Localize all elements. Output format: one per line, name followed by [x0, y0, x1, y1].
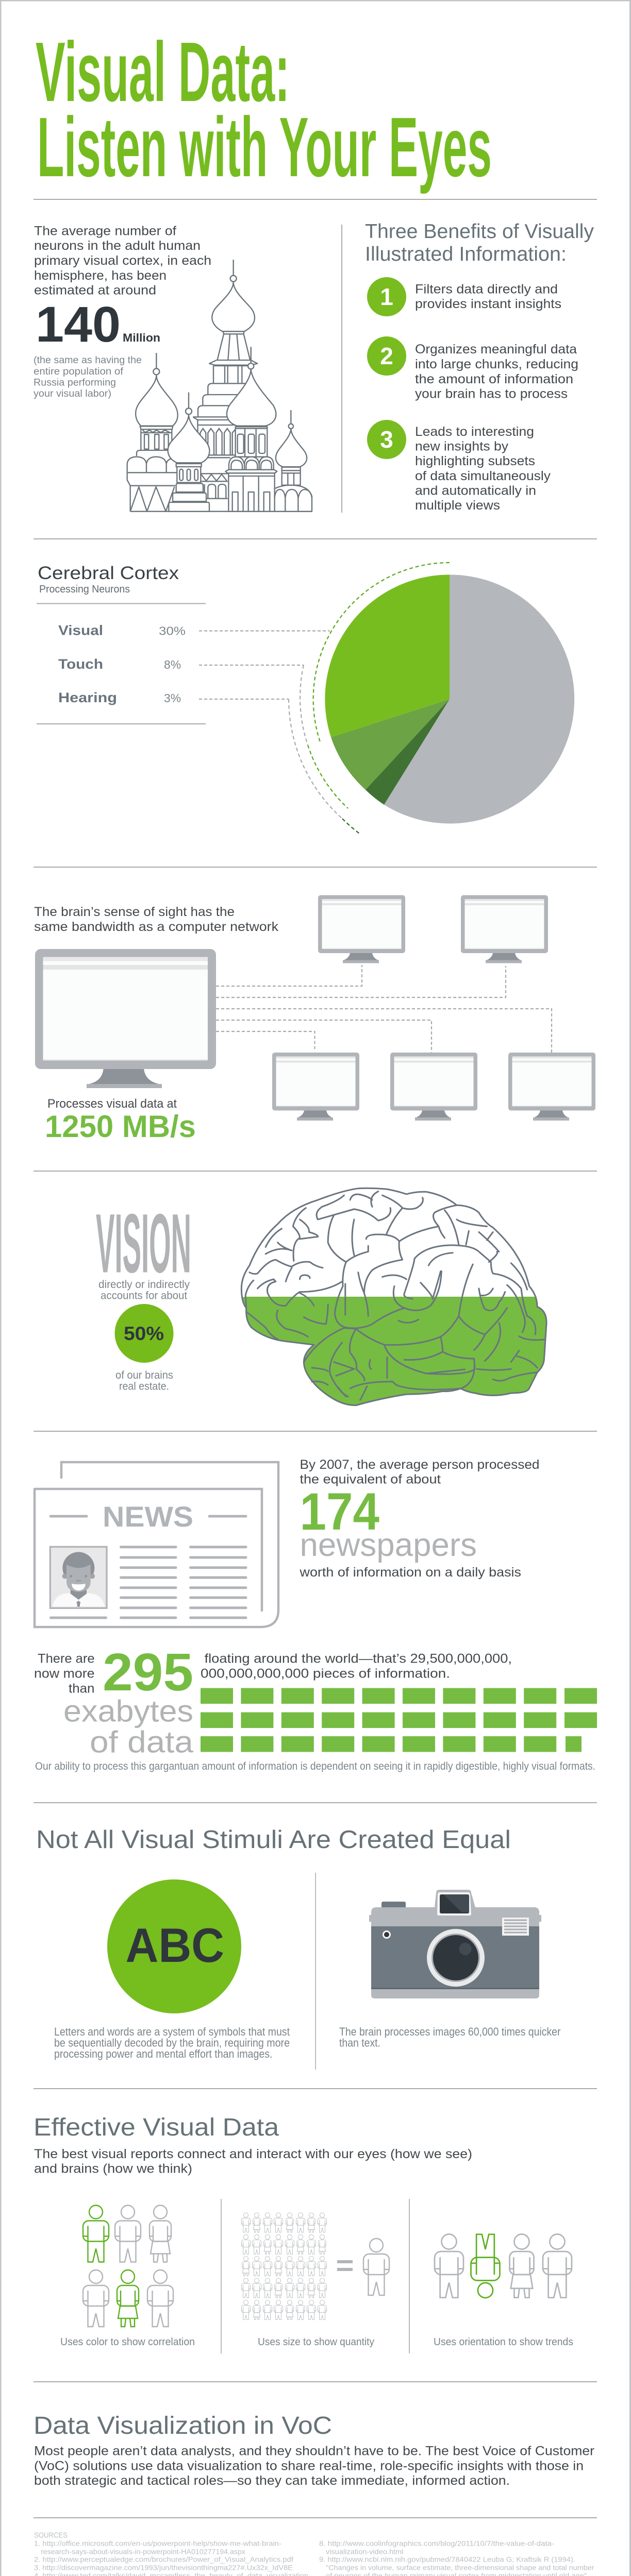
section: data visualization in VoC: (VoC) solutions use data visualization to share real-time, role-specific insights with those in — [34, 2459, 584, 2473]
stat: 295 exabytes — [34, 1642, 512, 1759]
stat: vision 50%: real estate. — [119, 1381, 169, 1392]
heading: three benefits: Three Benefits of Visually — [365, 221, 594, 243]
panel: cerebral cortex legend: Cerebral Cortex — [38, 563, 179, 583]
text: letters and words: processing power and mental effort than images. — [54, 2047, 272, 2060]
text: VISION — [96, 1196, 191, 1290]
panel: three benefits — [365, 221, 594, 513]
icon: newspaper — [35, 1462, 278, 1627]
section: data visualization in VoC: Most people aren’t data analysts, and they shouldn’t have to be. The best Voice of Customer — [34, 2444, 594, 2459]
stat: 295 exabytes: 000,000,000,000 pieces of information. — [201, 1666, 450, 1681]
russia note: entire population of — [34, 366, 124, 377]
panel: cerebral cortex legend: Processing Neurons — [39, 584, 130, 595]
sources: 8. http://www.coolinfographics.com/blog/2011/10/7/the-value-of-data- — [319, 2539, 554, 2548]
russia note: Russia performing — [34, 377, 116, 388]
icon: large monitor — [35, 949, 216, 1088]
pictogram: data squares — [201, 1688, 597, 1752]
pie chart: cerebral cortex — [325, 574, 574, 823]
panel: size quantity people: Uses size to show quantity — [258, 2336, 374, 2348]
heading: three benefits: Illustrated Information: — [365, 243, 567, 265]
panel: cerebral cortex legend — [37, 563, 206, 724]
section: data visualization in VoC — [34, 2412, 594, 2488]
equals sign — [337, 2262, 353, 2269]
newspaper text lines — [51, 1547, 246, 1618]
big number: 140 million: 140 — [36, 296, 121, 352]
stat: vision 50%: of our brains — [115, 1369, 173, 1381]
panel: color correlation people — [60, 2205, 195, 2348]
benefit 3: and automatically in — [415, 483, 536, 498]
stat: 295 exabytes: floating around the world—that’s 29,500,000,000, — [204, 1652, 512, 1666]
text: letters and words: Letters and words are a system of symbols that must — [54, 2025, 290, 2038]
neuron count text block — [34, 224, 211, 298]
sources: 1. http://office.microsoft.com/en-us/powerpoint-help/show-me-what-brain- — [34, 2539, 281, 2548]
stat: 174 newspapers: the equivalent of about — [300, 1472, 441, 1487]
sources: 2. http://www.perceptualedge.com/brochures/Power_of_Visual_Analytics.pdf — [34, 2555, 293, 2564]
text: images quicker — [339, 2025, 561, 2049]
stat: vision 50% — [96, 1196, 191, 1392]
sources — [34, 2531, 594, 2576]
callout lines: pie chart — [199, 563, 450, 835]
caption: processing ability: Our ability to process this gargantuan amount of information is dependent on seeing it in rapidly digestible, highly visual formats. — [35, 1760, 595, 1772]
benefit 3: highlighting subsets — [415, 454, 535, 468]
neuron count text block: The average number of — [34, 224, 176, 238]
panel: size quantity people — [241, 2213, 389, 2348]
stat: vision 50%: 50% — [124, 1323, 164, 1344]
newspaper masthead: NEWS — [103, 1500, 193, 1533]
russia note: (the same as having the — [34, 355, 142, 366]
stat: 295 exabytes: There are — [38, 1652, 95, 1666]
panel: cerebral cortex legend: Touch — [58, 656, 103, 672]
panel: orientation trends people — [434, 2234, 573, 2348]
benefit 2: into large chunks, reducing — [415, 357, 578, 371]
illustration: half-filled brain — [241, 1188, 546, 1405]
text: bandwidth: same bandwidth as a computer network — [34, 920, 279, 934]
benefit 1: Filters data directly and — [415, 282, 558, 297]
sources: 3. http://discovermagazine.com/1993/jun/thevisionthingma227#.Ux32x_IdV8E — [34, 2563, 293, 2571]
text: images quicker: than text. — [339, 2037, 380, 2049]
sources: 9. http://www.ncbi.nlm.nih.gov/pubmed/7840422 Leuba G; Kraftsik R (1994). — [319, 2555, 575, 2564]
benefit 3: multiple views — [415, 498, 500, 513]
neuron count text block: estimated at around — [34, 283, 156, 298]
heading: three benefits — [365, 221, 594, 265]
benefit 2: Organizes meaningful data — [415, 342, 577, 357]
stat: vision 50%: directly or indirectly — [98, 1279, 190, 1291]
benefit 3: Leads to interesting — [415, 425, 534, 439]
benefit 2: 2 — [380, 343, 393, 369]
small people grid — [241, 2213, 327, 2319]
icon: ABC circle: ABC — [126, 1918, 224, 1972]
icon: camera — [369, 1890, 541, 1998]
icon: monitor bottom left — [272, 1053, 359, 1121]
icon: monitor top right — [461, 895, 548, 963]
panel: color correlation people: Uses color to show correlation — [60, 2336, 195, 2348]
sources: "Changes in volume, surface estimate, three-dimensional shape and total number — [326, 2563, 594, 2571]
benefit 1: 1 — [380, 283, 393, 310]
benefit 3: 3 — [380, 426, 393, 453]
text: letters and words — [54, 2025, 290, 2060]
neuron count text block: neurons in the adult human — [34, 239, 201, 253]
benefit 3 — [367, 420, 551, 513]
text: bandwidth — [34, 905, 279, 934]
panel: cerebral cortex legend: Hearing — [58, 690, 117, 705]
big number: 140 million — [36, 296, 160, 352]
vertical dividers: effective visual data — [221, 2199, 409, 2353]
heading: effective visual data: Effective Visual Data — [34, 2114, 279, 2141]
sources: research-says-about-visuals-in-powerpoint-HA010277194.aspx — [41, 2547, 245, 2555]
vertical divider: top section — [341, 225, 342, 513]
stat: 174 newspapers: By 2007, the average person processed — [300, 1458, 539, 1472]
title: Visual Data: — [36, 25, 290, 119]
icon: cathedral line art — [127, 260, 312, 512]
benefit 2: your brain has to process — [415, 386, 568, 401]
neuron count text block: hemisphere, has been — [34, 268, 167, 283]
benefit 1: provides instant insights — [415, 297, 561, 311]
stat: 295 exabytes: exabytes — [63, 1694, 193, 1728]
russia note: your visual labor) — [34, 388, 111, 399]
section: data visualization in VoC: Data Visualization in VoC — [34, 2412, 332, 2439]
panel: cerebral cortex legend: Visual — [58, 622, 103, 638]
stat: vision 50%: accounts for about — [101, 1290, 187, 1301]
text: bandwidth: The brain’s sense of sight has the — [34, 905, 235, 919]
text: images quicker: The brain processes images 60,000 times quicker — [339, 2025, 561, 2038]
heading: effective visual data: The best visual reports connect and interact with our eyes (how we see) — [34, 2147, 472, 2161]
stat: 295 exabytes: than — [69, 1682, 95, 1696]
icon: monitor bottom middle — [390, 1053, 477, 1121]
text: letters and words: be sequentially decoded by the brain, requiring more — [54, 2037, 290, 2049]
stat: 174 newspapers: worth of information on a daily basis — [299, 1565, 521, 1580]
neuron count text block: primary visual cortex, in each — [34, 253, 211, 268]
stat: 295 exabytes: now more — [34, 1666, 95, 1681]
panel: cerebral cortex legend: 3% — [164, 691, 181, 705]
benefit 3: new insights by — [415, 439, 509, 453]
benefit 3: of data simultaneously — [415, 469, 551, 483]
network dashed connectors — [216, 965, 552, 1053]
icon: monitor bottom right — [508, 1053, 595, 1121]
section: data visualization in VoC: both strategic and tactical roles—so they can take immediate, informed action. — [34, 2473, 510, 2488]
heading: effective visual data: and brains (how we think) — [34, 2162, 192, 2176]
big number: 140 million: Million — [123, 331, 160, 344]
heading: not all visual stimuli: Not All Visual Stimuli Are Created Equal — [36, 1826, 511, 1854]
russia note — [34, 355, 142, 399]
vertical divider: stimuli — [315, 1873, 316, 2070]
stat: 1250 MB/s: 1250 MB/s — [45, 1109, 196, 1144]
stat: 174 newspapers: 174 — [300, 1482, 379, 1541]
stat: 295 exabytes: of data — [90, 1725, 193, 1759]
sources: visualization-video.html — [326, 2547, 403, 2555]
title — [36, 25, 492, 194]
stat: 1250 MB/s: Processes visual data at — [47, 1097, 177, 1111]
stat: 174 newspapers — [299, 1458, 539, 1580]
panel: cerebral cortex legend: 8% — [164, 658, 181, 671]
icon: ABC circle — [107, 1879, 241, 2013]
stat: 174 newspapers: newspapers — [300, 1527, 477, 1563]
panel: cerebral cortex legend: 30% — [159, 624, 186, 638]
stat: 295 exabytes: 295 — [103, 1642, 193, 1702]
panel: orientation trends people: Uses orientation to show trends — [434, 2336, 573, 2348]
benefit 1 — [367, 277, 561, 316]
benefit 2: the amount of information — [415, 372, 573, 386]
heading: effective visual data — [34, 2114, 472, 2176]
icon: monitor top left — [318, 895, 405, 963]
newspaper portrait — [50, 1547, 107, 1608]
sources: SOURCES — [34, 2531, 68, 2540]
benefit 2 — [367, 336, 578, 401]
